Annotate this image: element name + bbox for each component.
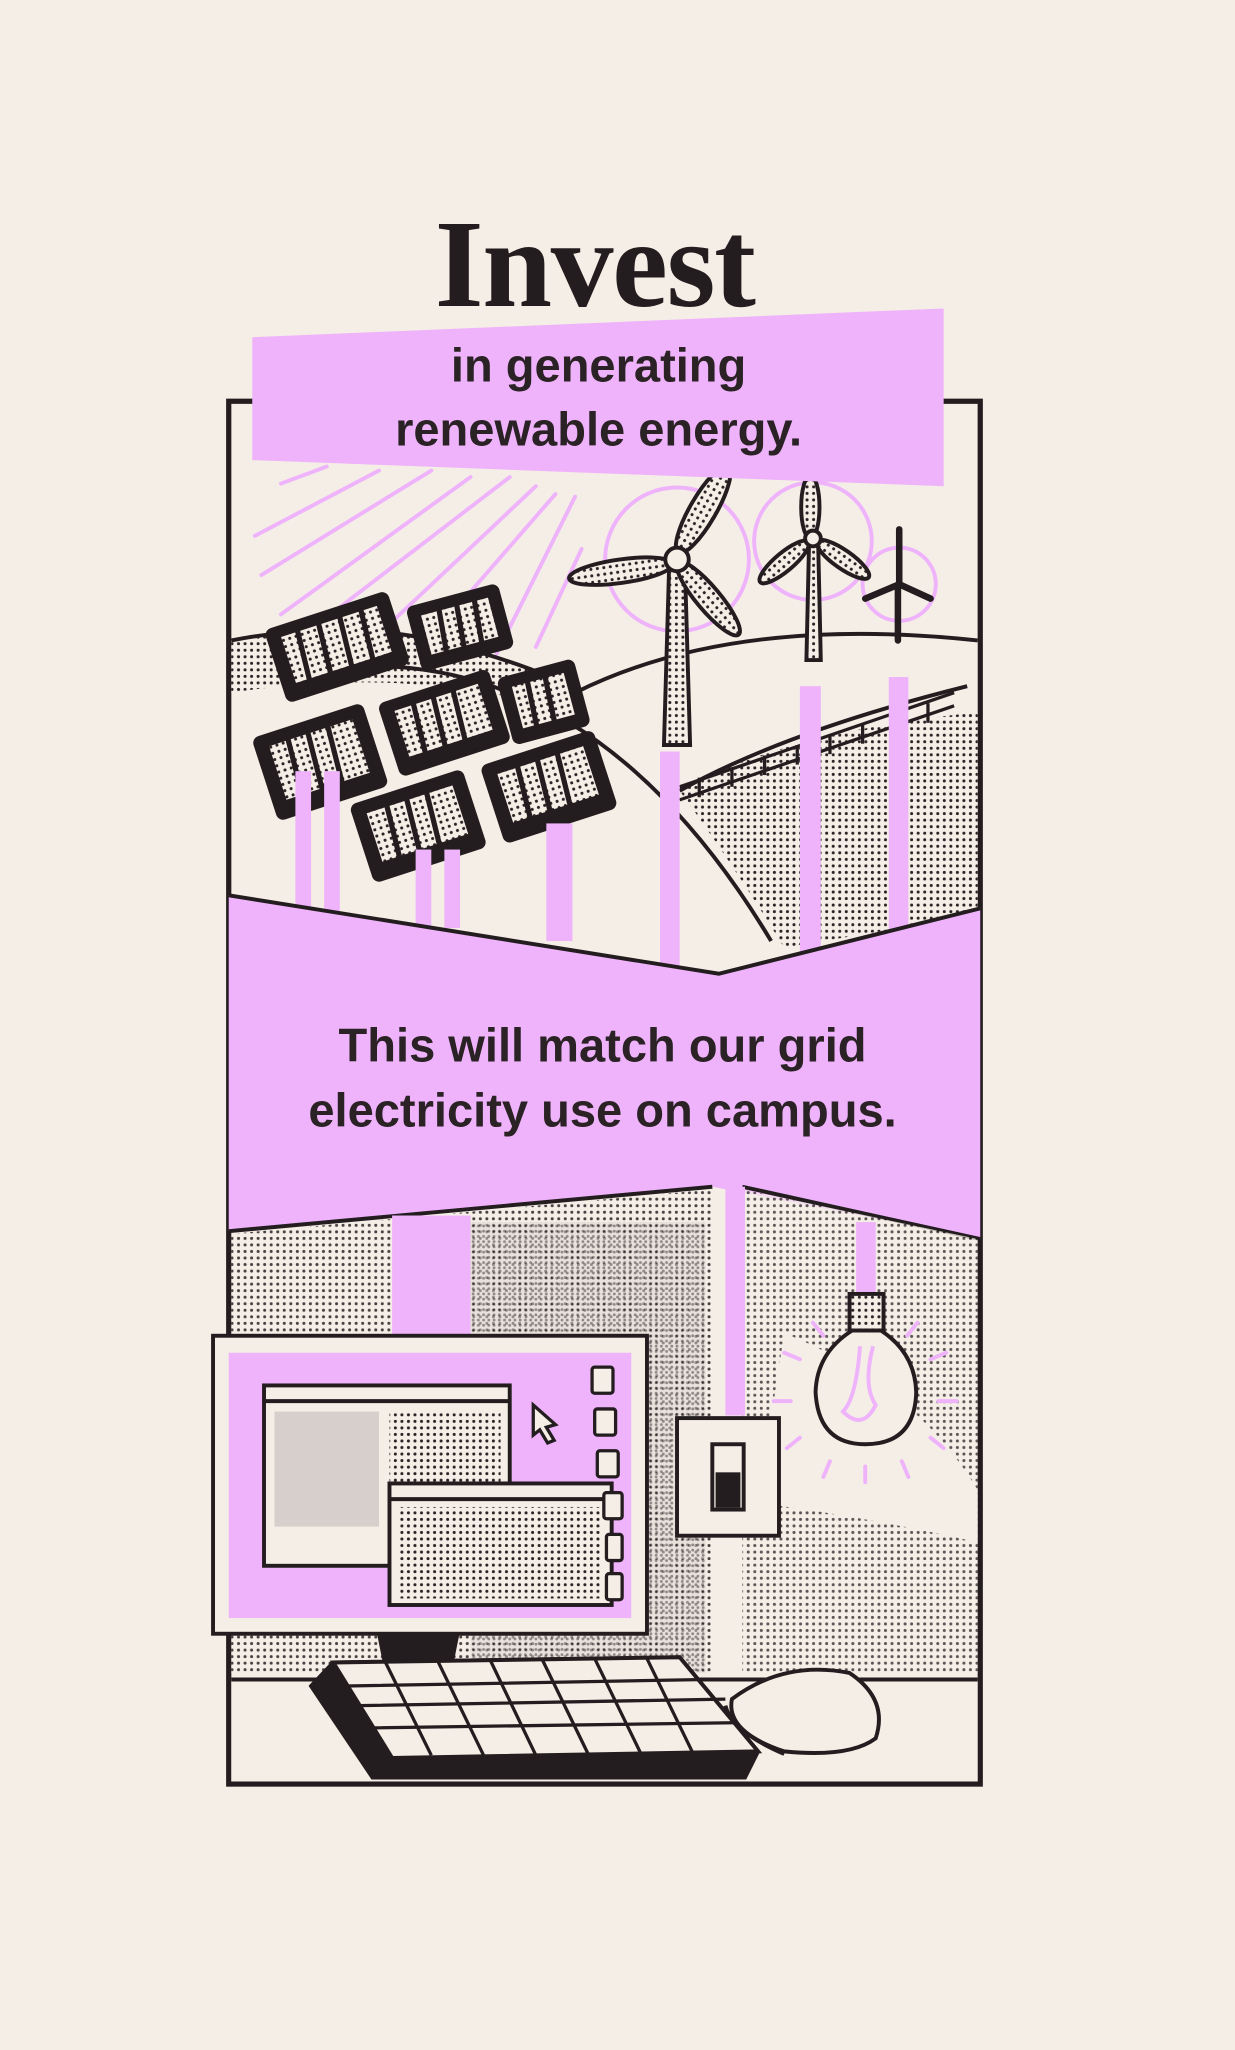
solar panels — [254, 585, 616, 881]
mouse — [725, 1670, 879, 1754]
title banner — [252, 308, 944, 486]
sun rays — [255, 467, 582, 654]
middle band — [229, 895, 980, 1239]
middle text line 2: electricity use on campus. — [308, 1084, 897, 1137]
fence — [680, 693, 954, 800]
small turbine — [865, 529, 931, 640]
room background — [231, 1189, 978, 1781]
middle text: This will match our grid — [339, 1018, 867, 1071]
monitor — [213, 1336, 647, 1666]
turbines — [567, 460, 874, 745]
subtitle line 1: in generating — [451, 339, 746, 392]
light switch — [677, 1418, 779, 1536]
turbine halos — [605, 482, 936, 631]
energy bars top — [295, 677, 908, 967]
subtitle line 2: renewable energy. — [395, 403, 802, 456]
title: Invest — [435, 195, 756, 334]
keyboard — [311, 1657, 758, 1778]
hills — [231, 630, 978, 948]
frame — [229, 401, 980, 1784]
light bulb — [774, 1294, 957, 1482]
energy bars bottom — [392, 1187, 876, 1415]
